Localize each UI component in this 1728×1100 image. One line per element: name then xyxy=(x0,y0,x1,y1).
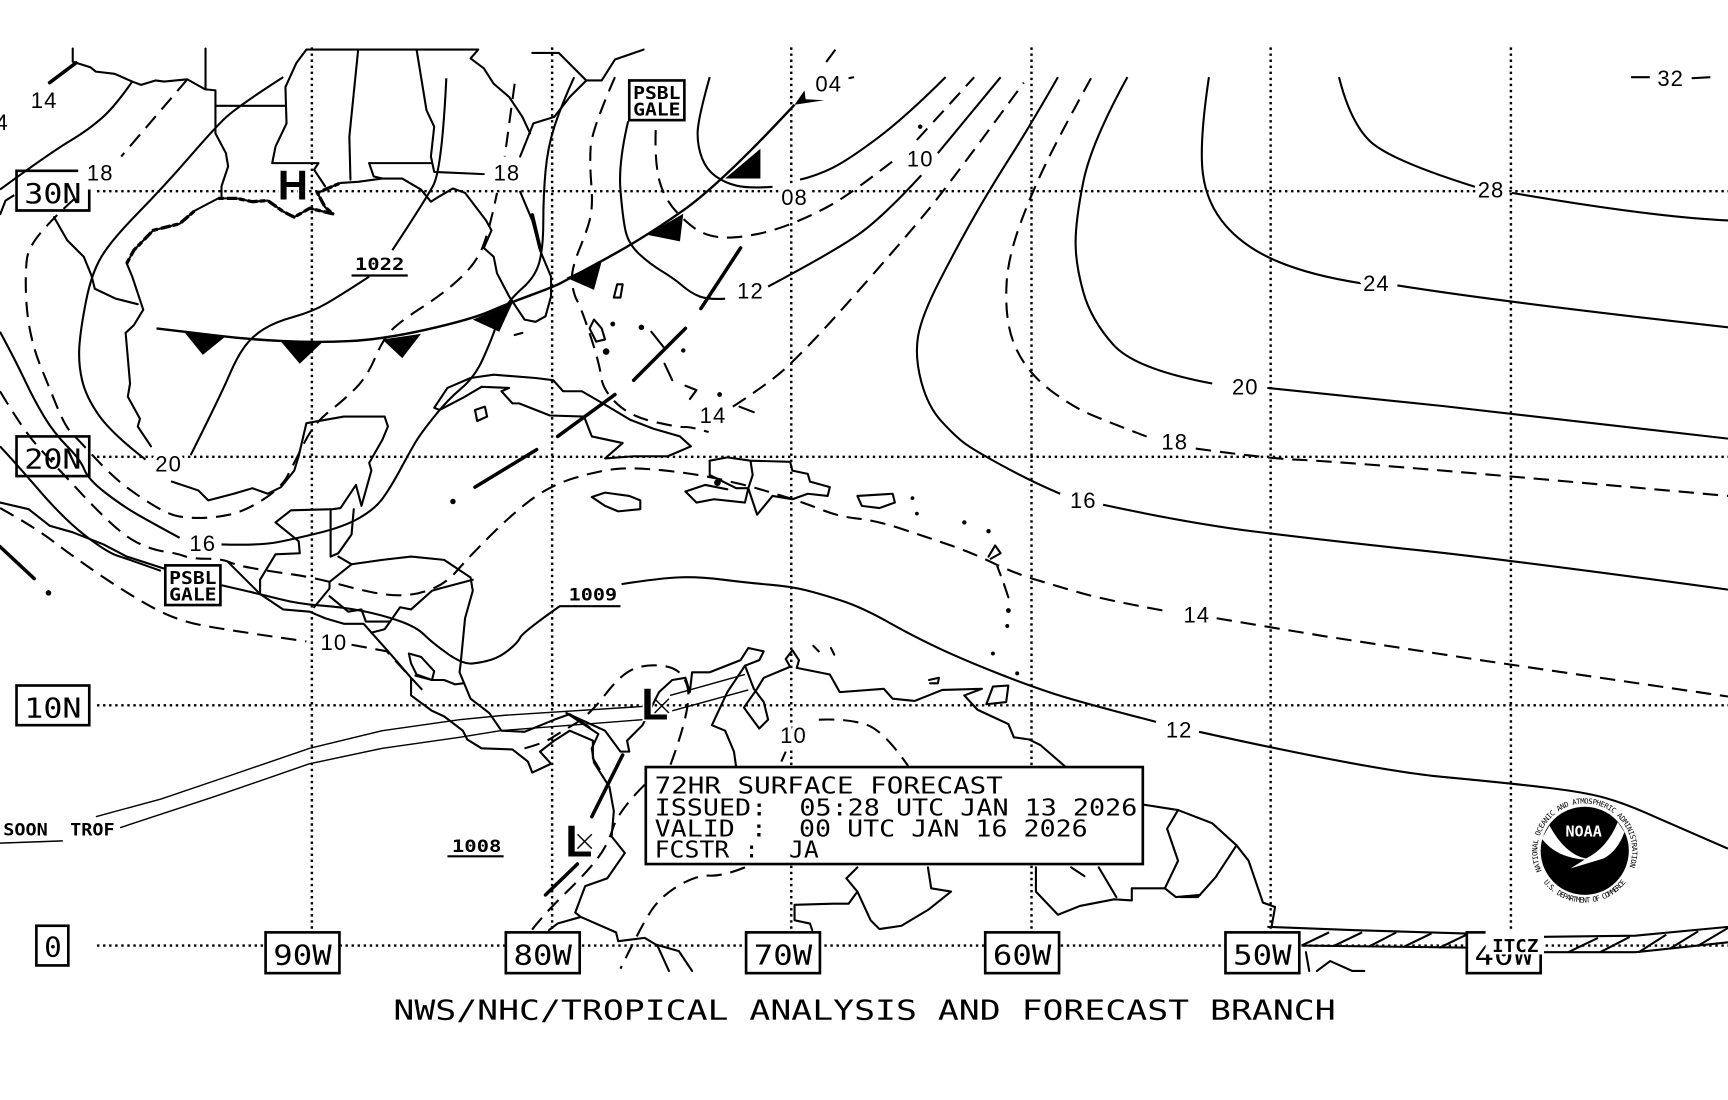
50W label: 50W xyxy=(1233,939,1292,971)
forecast information box: FCSTR : JA xyxy=(655,837,819,863)
30N label xyxy=(17,171,89,210)
isobar value labels: 10 xyxy=(780,723,807,748)
isobar value labels: 24 xyxy=(1363,271,1390,296)
high pressure symbol: H xyxy=(278,161,308,208)
40W label partly covered by ITCZ xyxy=(1467,930,1543,973)
50W label xyxy=(1225,932,1299,973)
possible gale box north: GALE xyxy=(633,101,681,121)
isobar value labels: 10 xyxy=(321,630,347,655)
pressure centre value 1008 xyxy=(447,837,504,856)
pressure centre value 1009: 1009 xyxy=(569,586,617,605)
30N label: 30N xyxy=(24,178,82,210)
isobar value labels: 14 xyxy=(700,403,726,428)
NOAA logo: U.S. DEPARTMENT OF COMMERCE xyxy=(1544,879,1626,903)
40W label partly covered by ITCZ: ITCZ xyxy=(1492,937,1538,957)
longitude label boxes xyxy=(266,930,1543,973)
equator label xyxy=(36,926,68,965)
possible gale box north xyxy=(629,80,684,121)
90W label xyxy=(266,932,339,973)
60W label xyxy=(985,932,1059,973)
possible gale box south: PSBL xyxy=(169,569,217,589)
forecast information box xyxy=(646,767,1143,864)
source credit footer: NWS/NHC/TROPICAL ANALYSIS AND FORECAST BRANCH xyxy=(393,994,1336,1026)
80W label xyxy=(506,932,580,973)
monsoon trough double line xyxy=(96,674,748,828)
20N label: 20N xyxy=(24,443,82,475)
70W label: 70W xyxy=(754,939,813,971)
80W label: 80W xyxy=(514,939,572,971)
monsoon trough label: SOON TROF xyxy=(3,820,115,839)
forecast information box: 72HR SURFACE FORECAST xyxy=(655,774,1003,800)
isobar value labels: 28 xyxy=(1478,177,1504,202)
isobar value labels: 16 xyxy=(189,531,216,556)
isobar value labels: 08 xyxy=(781,185,808,210)
NOAA logo: NOAA xyxy=(1565,822,1603,840)
forecast information box: ISSUED: 05:28 UTC JAN 13 2026 xyxy=(655,796,1137,822)
pressure centre value 1022: 1022 xyxy=(355,255,404,274)
isobar value labels: 12 xyxy=(1166,717,1193,742)
possible gale box south xyxy=(165,565,220,606)
forecast information box: VALID : 00 UTC JAN 16 2026 xyxy=(655,816,1088,842)
60W label: 60W xyxy=(993,939,1052,971)
surface troughs: thick line segments xyxy=(0,63,741,895)
isobar value labels: 16 xyxy=(1070,488,1097,513)
isobar value labels xyxy=(0,66,1684,748)
isobar value labels: 14 xyxy=(1183,603,1210,628)
isobar value labels: 04 xyxy=(815,71,842,96)
possible gale box north: PSBL xyxy=(633,84,681,104)
isobar value labels: 32 xyxy=(1657,66,1684,91)
isobar value labels: 18 xyxy=(1161,430,1188,455)
20N label xyxy=(17,436,89,476)
70W label xyxy=(746,932,820,973)
latitude and longitude dotted grid xyxy=(97,47,1728,946)
90W label: 90W xyxy=(273,939,332,971)
pressure centre value 1008: 1008 xyxy=(452,837,501,856)
isobar value labels: 20 xyxy=(1232,375,1259,400)
latitude label boxes xyxy=(17,171,89,965)
NOAA logo: NATIONAL OCEANIC AND ATMOSPHERIC ADMINISTRATION xyxy=(1532,798,1638,872)
isobar value labels: 12 xyxy=(737,279,764,304)
10N label xyxy=(17,686,89,725)
40W label partly covered by ITCZ: 40W xyxy=(1475,939,1533,971)
ITCZ hatched band xyxy=(1267,927,1728,952)
pressure centre value 1022 xyxy=(352,255,408,276)
10N label: 10N xyxy=(24,692,82,724)
cold front with triangular barbs xyxy=(156,90,824,364)
isobar value labels: 18 xyxy=(494,161,520,186)
equator label: 0 xyxy=(44,932,62,964)
isobar value labels: 18 xyxy=(87,161,114,186)
low pressure symbol south: L xyxy=(565,817,592,866)
isobar value labels: 14 xyxy=(31,88,57,113)
possible gale box south: GALE xyxy=(169,586,217,606)
NOAA logo xyxy=(1532,798,1638,903)
low pressure symbol north: L xyxy=(641,681,668,730)
isobar value labels: 10 xyxy=(907,146,934,171)
isobar value labels: 20 xyxy=(155,452,182,477)
coastlines and political borders xyxy=(0,48,1364,971)
